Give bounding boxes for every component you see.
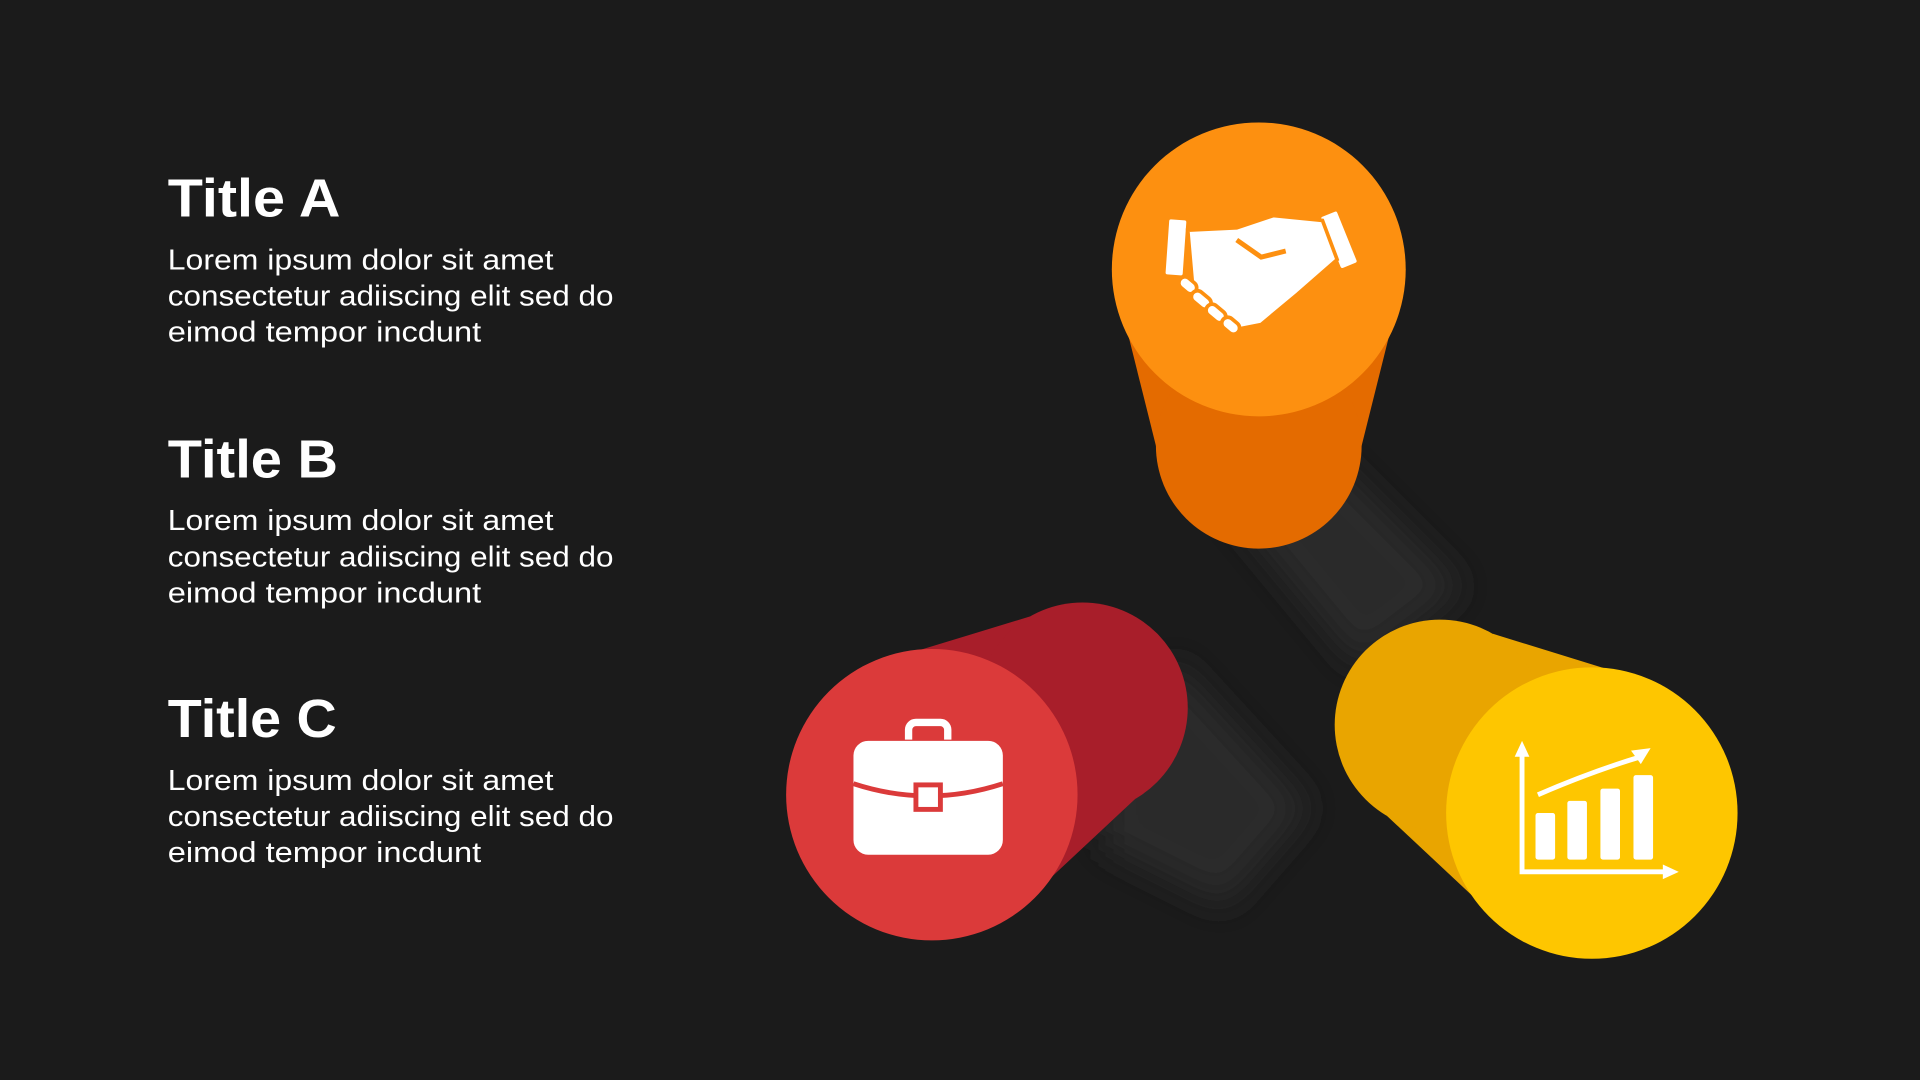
cylinder: yellow	[1335, 620, 1738, 959]
icon: handshake	[1164, 209, 1360, 337]
text block: Title C: eimod tempor incdunt	[168, 837, 481, 869]
text block: Title B: consectetur adiiscing elit sed do	[168, 541, 613, 573]
text block: Title A	[168, 169, 613, 349]
icon: growth chart	[1515, 741, 1679, 879]
icon: briefcase	[853, 722, 1003, 855]
text block: Title C	[168, 689, 613, 869]
text block: Title B	[168, 430, 613, 609]
text block: Title C: Lorem ipsum dolor sit amet	[168, 765, 553, 797]
cylinder: orange	[1112, 122, 1406, 549]
shadow: red	[1102, 661, 1310, 906]
text block: Title C: Title C	[168, 689, 337, 749]
text block: Title B: Lorem ipsum dolor sit amet	[168, 505, 553, 537]
text block: Title A: Lorem ipsum dolor sit amet	[168, 244, 553, 276]
cylinder: red	[786, 602, 1188, 940]
text block: Title A: Title A	[168, 169, 340, 229]
shadow: orange	[1212, 441, 1463, 667]
text block: Title C: consectetur adiiscing elit sed do	[168, 801, 613, 833]
text block: Title B: eimod tempor incdunt	[168, 577, 481, 609]
text block: Title A: consectetur adiiscing elit sed do	[168, 281, 613, 313]
text block: Title A: eimod tempor incdunt	[168, 317, 481, 349]
text block: Title B: Title B	[168, 430, 338, 490]
